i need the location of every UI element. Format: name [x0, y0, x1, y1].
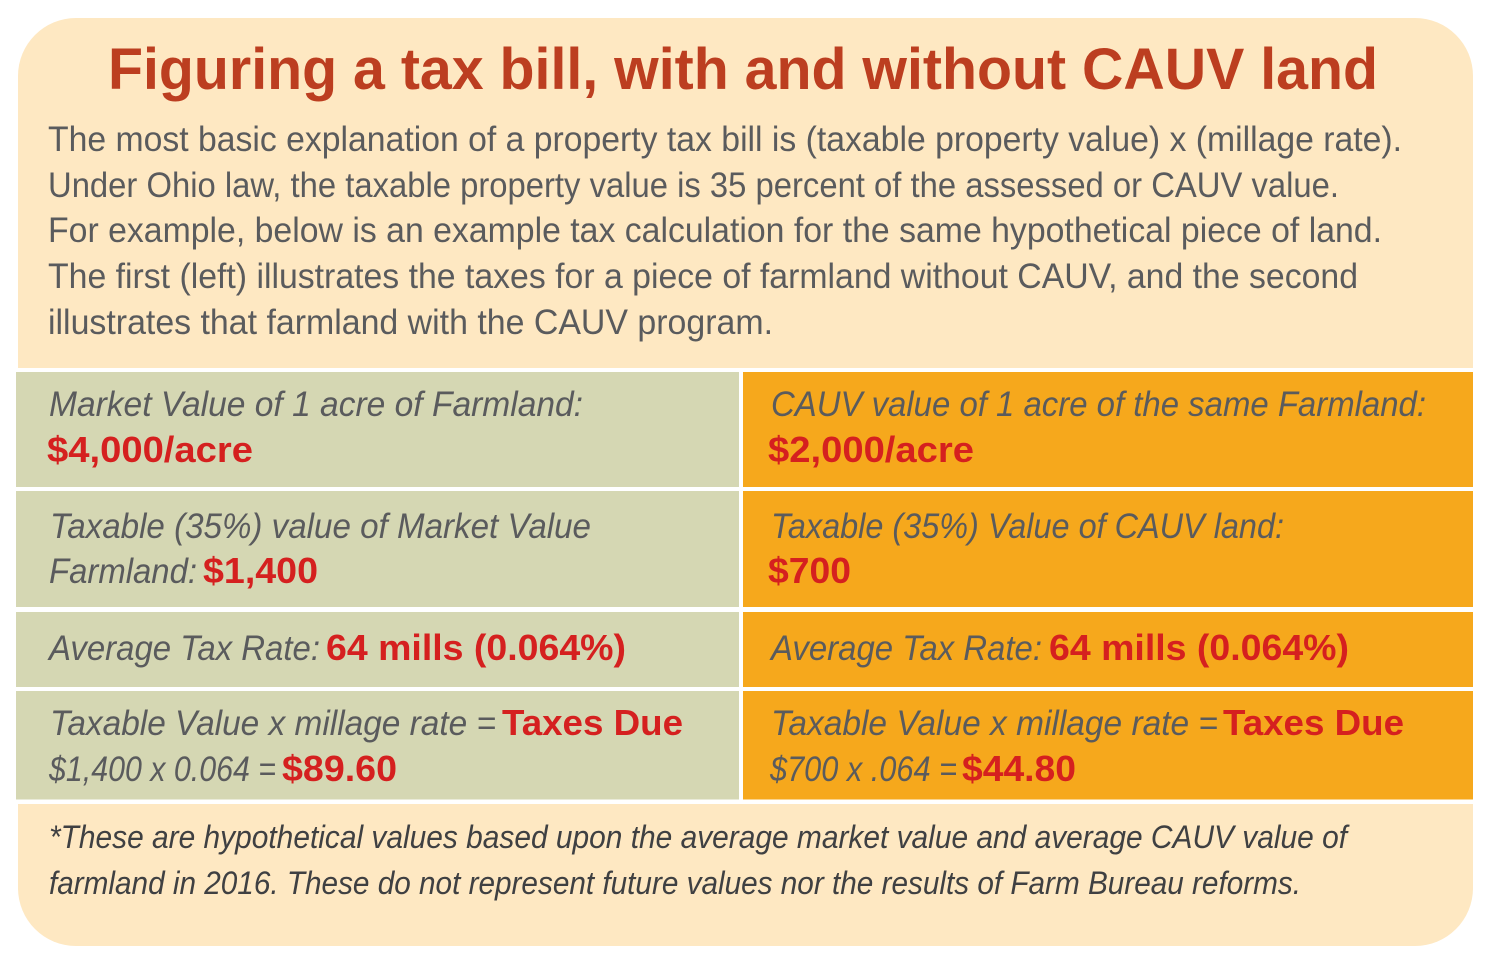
right column: CAUV farmland [743, 372, 1473, 800]
intro text block: The most basic explanation of a property tax bill is (taxable property value) x (millage rate). [48, 120, 1402, 159]
intro text block: illustrates that farmland with the CAUV program. [48, 303, 773, 342]
row: average tax rate [16, 612, 739, 687]
row: taxes due: Taxable Value x millage rate = [771, 704, 1218, 743]
row: market value: Market Value of 1 acre of Farmland: [49, 385, 583, 424]
intro text block [48, 120, 1402, 342]
row: taxable CAUV value: $700 [768, 550, 851, 591]
row: CAUV value: CAUV value of 1 acre of the same Farmland: [771, 385, 1426, 424]
row: average tax rate: Average Tax Rate: [769, 629, 1042, 668]
footnote: *These are hypothetical values based upon the average market value and average CAUV value of [49, 819, 1350, 855]
left column: market value farmland [16, 372, 739, 800]
row: taxes due: $700 x .064 = [769, 750, 957, 789]
row: average tax rate: 64 mills (0.064%) [1049, 627, 1349, 668]
row: taxable value: $1,400 [203, 550, 318, 591]
row: CAUV value [743, 372, 1473, 487]
row: market value: $4,000/acre [47, 429, 253, 470]
table: tax comparison [16, 368, 1473, 804]
row: average tax rate [743, 612, 1473, 687]
row: average tax rate: 64 mills (0.064%) [326, 627, 626, 668]
row: taxable value: Farmland: [49, 552, 197, 591]
row: CAUV value: $2,000/acre [768, 429, 974, 470]
intro text block: The first (left) illustrates the taxes for a piece of farmland without CAUV, and the second [48, 257, 1358, 296]
row: market value [16, 372, 739, 487]
row: taxes due [16, 691, 739, 800]
row: taxes due: Taxable Value x millage rate = [50, 704, 496, 743]
row: average tax rate: Average Tax Rate: [47, 629, 320, 668]
row: taxes due: Taxes Due [502, 702, 683, 743]
row: taxes due: $89.60 [282, 748, 397, 789]
intro text block: For example, below is an example tax calculation for the same hypothetical piece of land. [48, 211, 1382, 250]
row: taxable CAUV value [743, 491, 1473, 607]
footnote: farmland in 2016. These do not represent future values nor the results of Farm Bureau reforms. [49, 865, 1301, 901]
intro text block: Under Ohio law, the taxable property value is 35 percent of the assessed or CAUV value. [48, 166, 1339, 205]
title: Figuring a tax bill, with and without CAUV land [108, 37, 1378, 102]
row: taxes due: $44.80 [962, 748, 1076, 789]
row: taxable value: Taxable (35%) value of Market Value [50, 507, 591, 546]
row: taxes due: $1,400 x 0.064 = [48, 750, 276, 789]
footnote [49, 819, 1350, 901]
row: taxable CAUV value: Taxable (35%) Value of CAUV land: [771, 507, 1284, 546]
row: taxes due [743, 691, 1473, 800]
row: taxable value [16, 491, 739, 607]
row: taxes due: Taxes Due [1223, 702, 1404, 743]
